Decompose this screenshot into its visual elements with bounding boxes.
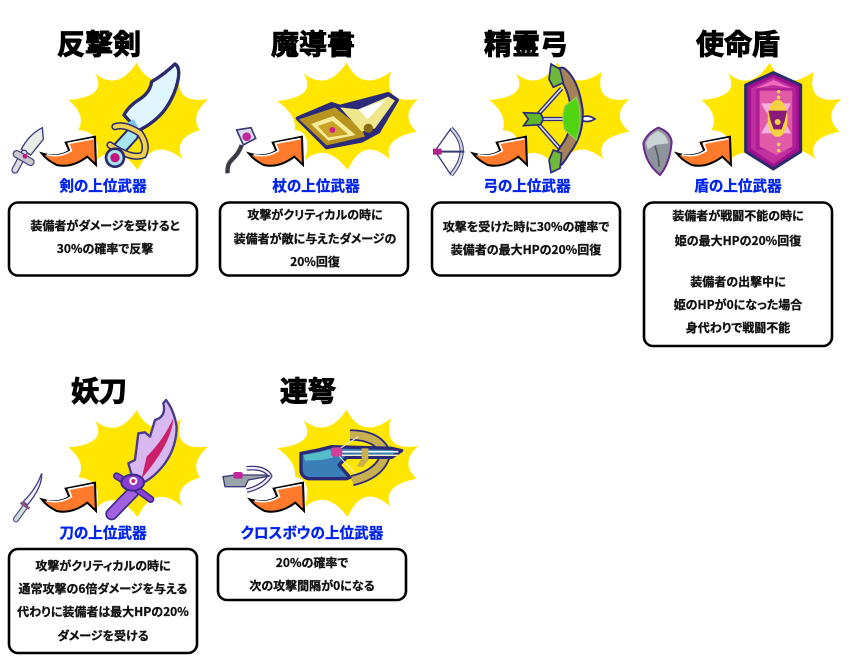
label: 刀の上位武器: 刀の上位武器	[59, 522, 147, 543]
description box: 20%の確率で	[276, 554, 349, 571]
title: 連弩: 連弩	[280, 370, 336, 410]
panel: 精霊弓	[432, 23, 629, 276]
description box: ダメージを受ける	[57, 627, 149, 644]
description box: 姫の最大HPの20%回復	[675, 232, 801, 249]
description box: 装備者の最大HPの20%回復	[451, 241, 601, 258]
icon: small katana	[16, 473, 42, 519]
label: 剣の上位武器: 剣の上位武器	[59, 175, 147, 196]
description box: 攻撃を受けた時に30%の確率で	[443, 218, 610, 235]
icon: small bow	[433, 128, 464, 175]
icon: small sword	[15, 128, 43, 170]
label: クロスボウの上位武器: クロスボウの上位武器	[241, 522, 384, 543]
arrow	[42, 137, 96, 166]
description box	[9, 202, 197, 276]
description box: 通常攻撃の6倍ダメージを与える	[19, 580, 187, 597]
title: 反撃剣: 反撃剣	[57, 23, 141, 63]
arrow	[42, 483, 96, 512]
description box: 装備者がダメージを受けると	[30, 217, 180, 234]
title: 精霊弓: 精霊弓	[484, 23, 568, 63]
description box	[644, 202, 832, 346]
arrow	[250, 483, 304, 512]
description box	[220, 202, 408, 276]
description box: 攻撃がクリティカルの時に	[35, 557, 171, 574]
description box	[9, 549, 197, 653]
label: 弓の上位武器: 弓の上位武器	[483, 175, 571, 196]
burst and upgraded book	[277, 63, 418, 170]
description box: 装備者の出撃中に	[690, 273, 786, 290]
label: 杖の上位武器: 杖の上位武器	[272, 175, 360, 196]
title: 魔導書: 魔導書	[271, 23, 355, 63]
icon: small crossbow	[223, 468, 270, 491]
panel: 妖刀	[9, 370, 208, 653]
description box: 装備者が敵に与えたダメージの	[234, 230, 397, 247]
description box: 次の攻撃間隔が0になる	[249, 577, 375, 594]
description box: 30%の確率で反撃	[57, 240, 153, 257]
label: 盾の上位武器: 盾の上位武器	[694, 175, 782, 196]
icon: small staff	[227, 128, 256, 173]
burst and upgraded katana	[68, 400, 208, 517]
description box	[218, 549, 406, 600]
panel: 魔導書	[220, 23, 418, 276]
icon: small shield	[643, 128, 672, 175]
arrow	[249, 137, 303, 166]
burst and upgraded sword	[68, 63, 208, 170]
arrow	[473, 137, 527, 166]
arrow	[677, 137, 731, 166]
description box: 代わりに装備者は最大HPの20%	[17, 603, 189, 620]
description box: 姫のHPが0になった場合	[674, 296, 802, 313]
panel: 連弩	[218, 370, 418, 600]
description box: 身代わりで戦闘不能	[686, 319, 790, 336]
description box	[432, 202, 620, 276]
burst and upgraded shield	[701, 63, 841, 170]
title: 使命盾: 使命盾	[696, 23, 780, 63]
burst and upgraded bow	[489, 63, 629, 173]
panel: 使命盾	[643, 23, 841, 346]
description box: 装備者が戦闘不能の時に	[672, 207, 804, 224]
burst and upgraded crossbow	[277, 410, 418, 517]
panel: 反撃剣	[9, 23, 208, 276]
title: 妖刀: 妖刀	[71, 370, 127, 410]
description box: 20%回復	[290, 253, 340, 270]
description box: 攻撃がクリティカルの時に	[247, 206, 383, 223]
